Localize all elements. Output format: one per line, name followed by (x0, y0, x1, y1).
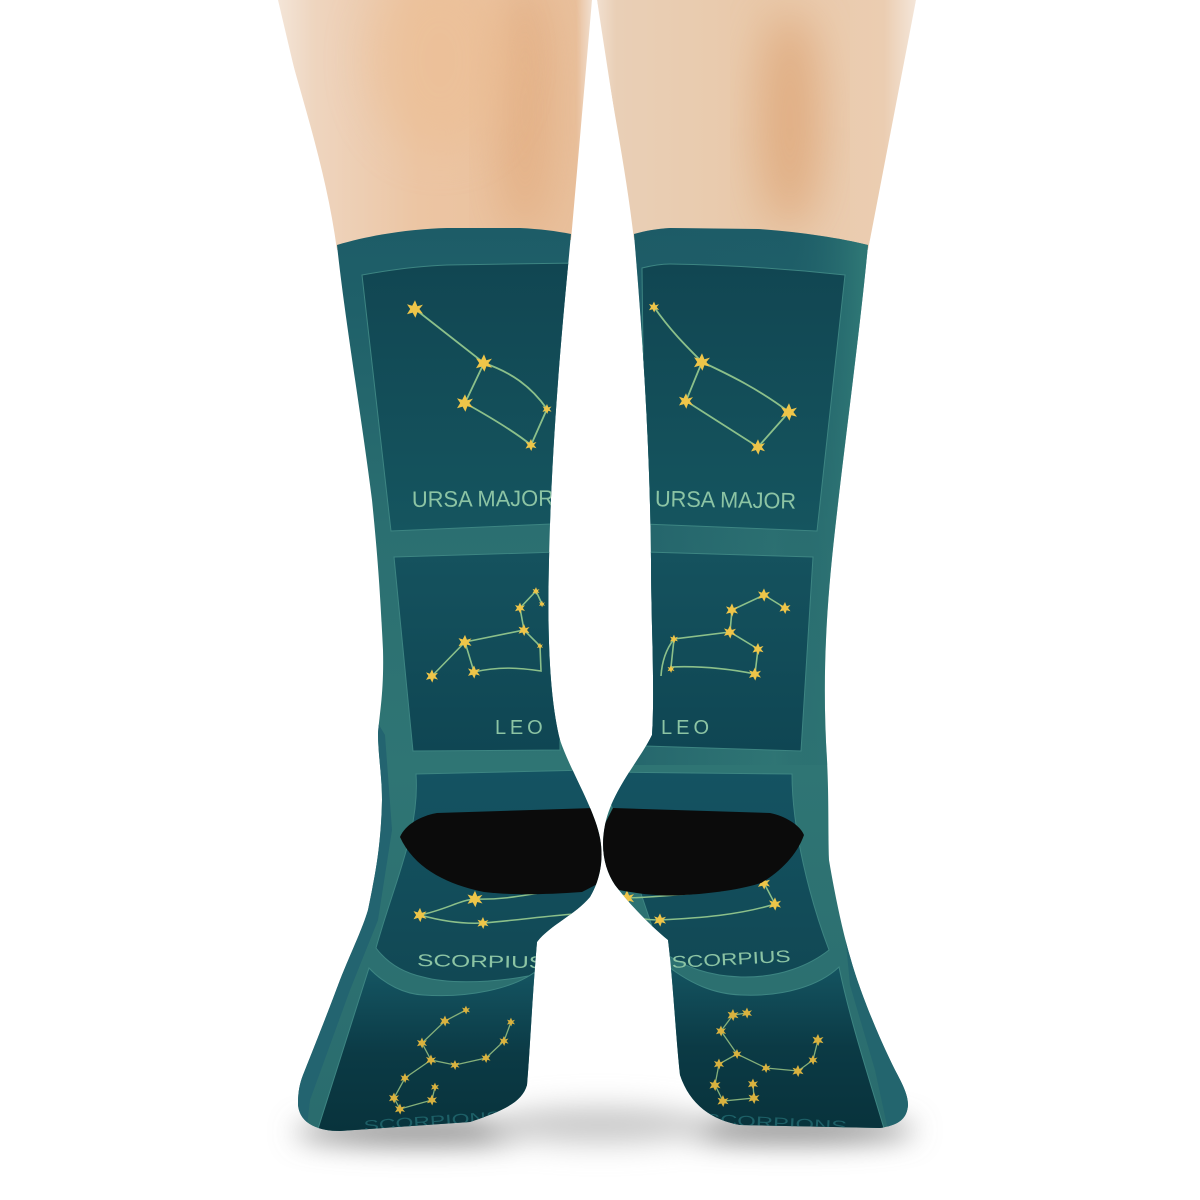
panel: Scorpions left (316, 968, 545, 1140)
constellation: Scorpius right (622, 880, 781, 926)
panel: Ursa Major left (362, 263, 575, 531)
constellation: Scorpius left (414, 891, 575, 929)
constellation: Scorpions right (710, 1008, 824, 1107)
label: SCORPIUS left: SCORPIUS (417, 951, 545, 972)
panel: Leo left (394, 552, 560, 751)
dark outer edge strip left (298, 724, 392, 1122)
product photo: pair of constellation socks (278, 0, 922, 1164)
black heel right (598, 808, 804, 895)
left leg (276, 0, 592, 250)
right sock (595, 225, 915, 1145)
constellation: Ursa Major right (649, 302, 797, 455)
dark outer edge strip right (846, 940, 908, 1127)
floor shadow (295, 1107, 915, 1144)
right leg (597, 0, 916, 250)
label: LEO left: LEO (495, 717, 546, 739)
panel: Scorpius left (376, 770, 600, 982)
panel: Scorpius right (600, 772, 829, 977)
label: LEO right: LEO (661, 717, 713, 739)
black heel left (400, 808, 610, 894)
label: SCORPIONS right: SCORPIONS (704, 1111, 847, 1135)
constellation: Leo left (426, 587, 545, 683)
label: URSA MAJOR right: URSA MAJOR (655, 486, 796, 514)
label: URSA MAJOR left: URSA MAJOR (412, 486, 554, 512)
panel: Scorpions right (670, 966, 884, 1128)
left sock (285, 225, 610, 1145)
constellation: Leo right (661, 588, 790, 681)
panel: Leo right (645, 552, 813, 751)
constellation: Ursa Major left (407, 300, 552, 451)
constellation: Scorpions left (389, 1006, 515, 1114)
label: SCORPIONS left: SCORPIONS (363, 1108, 502, 1135)
panel: Ursa Major right (642, 264, 845, 531)
label: SCORPIUS right: SCORPIUS (671, 947, 791, 972)
